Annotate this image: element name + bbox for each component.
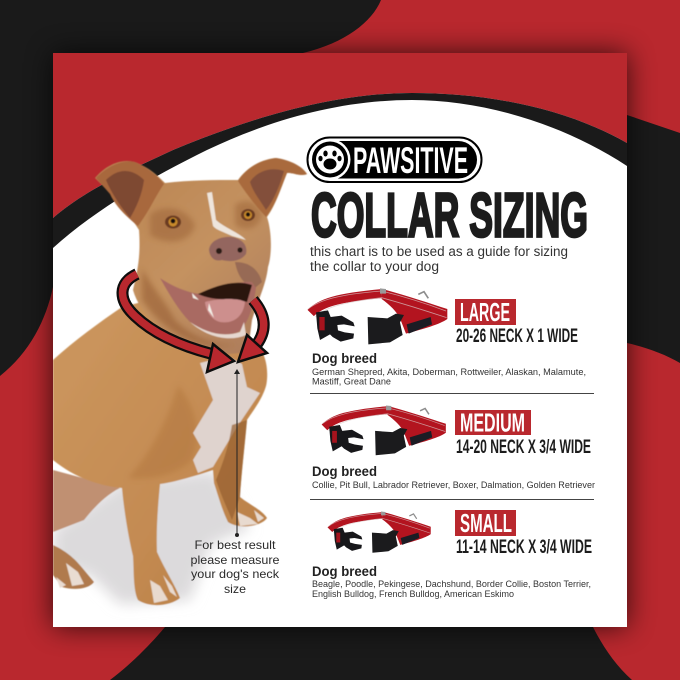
dimensions: medium: 14-20 NECK X 3/4 WIDE bbox=[456, 437, 591, 458]
subtitle bbox=[310, 244, 568, 274]
size label: LARGE bbox=[455, 297, 516, 327]
note: measure neck: size bbox=[224, 582, 246, 596]
main white panel bbox=[53, 53, 627, 627]
breeds: small: Dog breed bbox=[312, 564, 377, 579]
breeds: large bbox=[312, 351, 586, 386]
size label: SMALL: SMALL bbox=[460, 508, 512, 538]
ground shadow bbox=[53, 470, 250, 604]
breeds: large: Dog breed bbox=[312, 351, 377, 366]
panel: medium size bbox=[312, 405, 595, 490]
note: measure neck: your dog's neck bbox=[191, 567, 280, 581]
rear leg shade bbox=[216, 420, 247, 520]
dog photo illustration bbox=[53, 158, 307, 605]
nose bbox=[209, 237, 246, 261]
breeds: medium: Dog breed bbox=[312, 464, 377, 479]
note: measure neck: For best result bbox=[194, 538, 276, 552]
panel drop shadow bbox=[53, 53, 627, 627]
right arrow bbox=[238, 300, 267, 362]
back paw bbox=[53, 545, 94, 589]
dimensions: large: 20-26 NECK X 1 WIDE bbox=[456, 326, 578, 347]
neck measuring arrows bbox=[122, 274, 267, 372]
right ear bbox=[238, 158, 307, 217]
collar image: small bbox=[328, 511, 431, 553]
breeds: large: German Shepred, Akita, Doberman, Rottweiler, Alaskan, Malamute, bbox=[312, 367, 586, 377]
body shading bbox=[134, 391, 195, 478]
logo: Pawsitive badge: PAWSITIVE bbox=[353, 140, 468, 181]
left ear bbox=[96, 161, 164, 226]
size label: MEDIUM bbox=[455, 408, 531, 438]
dimensions: small: 11-14 NECK X 3/4 WIDE bbox=[456, 537, 592, 558]
breeds: medium bbox=[312, 464, 595, 490]
teeth bbox=[192, 293, 214, 318]
size label: SMALL bbox=[455, 508, 516, 538]
face shading bbox=[150, 201, 262, 242]
icon: paw in circle bbox=[310, 139, 350, 180]
head and neck bbox=[95, 158, 307, 354]
tongue bbox=[205, 299, 245, 322]
white chest bbox=[193, 356, 260, 473]
pointer line from neck to note bbox=[234, 369, 240, 537]
left arrow bbox=[122, 274, 234, 372]
open mouth bbox=[160, 278, 256, 334]
subtitle: the collar to your dog bbox=[310, 259, 439, 274]
dog body bbox=[53, 300, 267, 605]
size label: LARGE: LARGE bbox=[460, 297, 510, 327]
breeds: medium: Collie, Pit Bull, Labrador Retriever, Boxer, Dalmation, Golden Retriever bbox=[312, 480, 595, 490]
collar image: large bbox=[308, 288, 447, 344]
breeds: small bbox=[312, 564, 591, 599]
note: measure neck bbox=[190, 538, 280, 596]
note: measure neck: please measure bbox=[190, 553, 280, 567]
logo: Pawsitive badge bbox=[308, 138, 482, 182]
panel: large size bbox=[308, 288, 586, 386]
subtitle: this chart is to be used as a guide for sizing bbox=[310, 244, 568, 259]
collar image: medium bbox=[322, 405, 446, 455]
breeds: small: Beagle, Poodle, Pekingese, Dachshund, Border Collie, Boston Terrier, bbox=[312, 579, 591, 589]
forehead blaze bbox=[207, 192, 246, 240]
size label: MEDIUM: MEDIUM bbox=[460, 408, 525, 438]
breeds: large: Mastiff, Great Dane bbox=[312, 376, 391, 386]
eyes bbox=[165, 216, 181, 228]
haunch and belly bbox=[53, 470, 120, 532]
paw highlights bbox=[150, 510, 264, 603]
breeds: small: English Bulldog, French Bulldog, American Eskimo bbox=[312, 589, 514, 599]
muzzle shade bbox=[235, 262, 262, 288]
panel: small size bbox=[312, 508, 592, 599]
lower jaw bbox=[190, 322, 246, 338]
